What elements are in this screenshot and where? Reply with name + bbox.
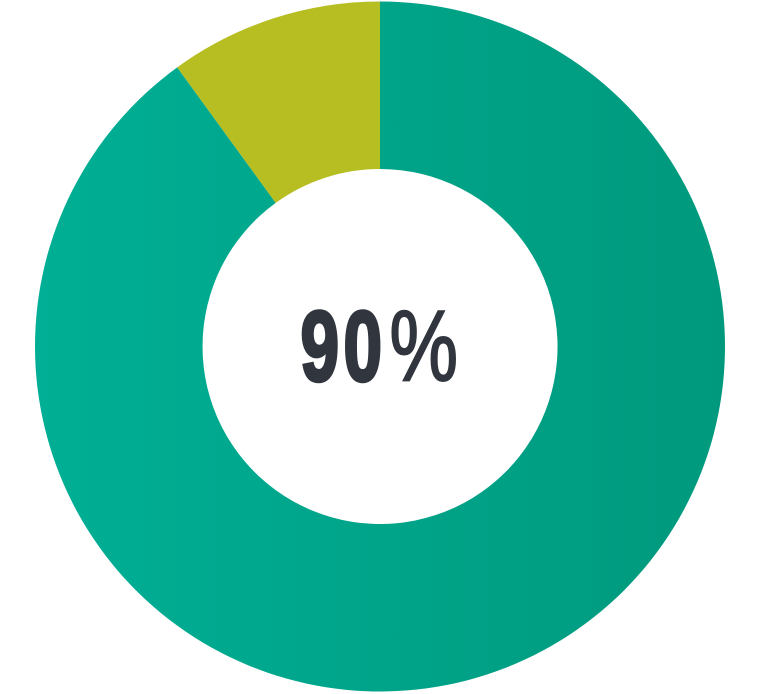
center label: 90%: 0 <box>344 292 382 403</box>
donut segment: 10% olive <box>177 2 380 203</box>
center label: 90%: % <box>390 290 458 402</box>
center label: 90% <box>300 290 458 403</box>
center label: 90%: 9 <box>300 292 339 403</box>
